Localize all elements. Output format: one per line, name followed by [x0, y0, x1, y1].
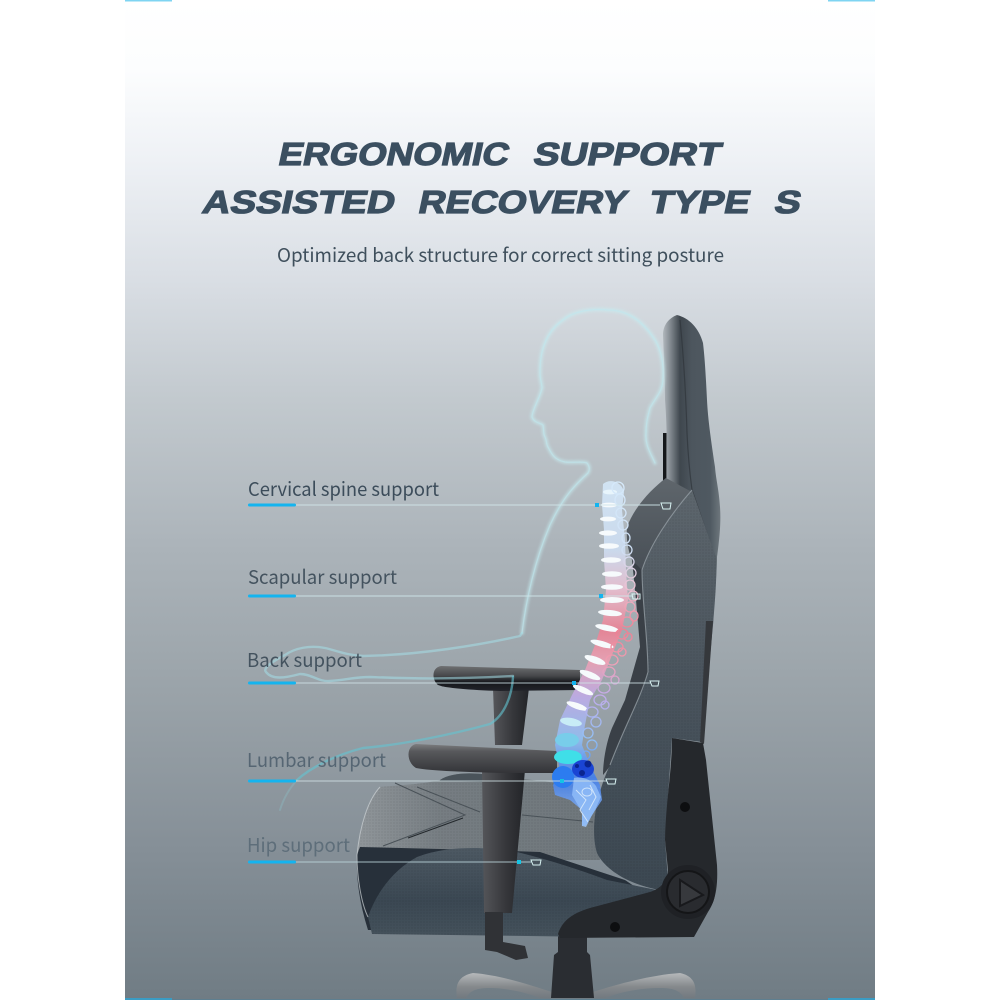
label: Hip support [247, 831, 350, 858]
back side strip [700, 621, 713, 744]
blue accent [248, 780, 296, 782]
gaming chair [357, 315, 720, 998]
tag [531, 860, 541, 865]
lumbar cyan discs [554, 716, 583, 764]
bottom accent lines [125, 998, 875, 1000]
callout: scapular support [248, 563, 640, 599]
seat edge highlight [357, 787, 380, 917]
dot [517, 860, 521, 864]
callout: lumbar support [247, 746, 616, 784]
vertebral body column [553, 481, 628, 827]
spine vertebra discs [566, 490, 624, 713]
title line 1: SUPPORT [531, 136, 725, 172]
seat seams [383, 783, 593, 846]
spinous processes [582, 482, 638, 759]
title line 2: ASSISTED [200, 184, 399, 220]
blue accent [248, 594, 296, 598]
side plate [558, 738, 717, 938]
thigh fade [280, 780, 297, 810]
leader line [248, 861, 532, 863]
head and back glow [522, 309, 663, 633]
tag [650, 681, 659, 686]
dot [560, 779, 564, 783]
seat cushion [368, 848, 660, 937]
dot [595, 503, 599, 507]
seat top texture [357, 773, 600, 860]
headrest seam [680, 320, 715, 557]
forearm and thigh outline [297, 677, 513, 780]
seat rear rim [440, 773, 490, 782]
tag [606, 779, 616, 784]
near armrest post [482, 770, 525, 913]
leader line [248, 504, 660, 506]
blue accent [248, 504, 296, 506]
background panel [125, 0, 875, 1000]
blue accent [248, 682, 296, 684]
far armrest pad [433, 666, 580, 691]
title line 2: TYPE [647, 184, 754, 220]
title line 1 [276, 136, 725, 172]
title line 2: RECOVERY [416, 184, 632, 220]
spine illustration [552, 481, 638, 827]
gas lift column [551, 936, 594, 998]
human silhouette [265, 309, 663, 810]
subtitle: Optimized back structure for correct sitting posture [277, 241, 724, 268]
head and back line [522, 309, 663, 633]
seat top [357, 773, 600, 860]
callout: back support [247, 646, 659, 686]
blue accent [248, 860, 296, 864]
label: Back support [247, 646, 362, 673]
dot [599, 594, 603, 598]
pelvis blue [552, 760, 601, 826]
backrest main [594, 490, 716, 890]
sacrum lace [576, 785, 596, 822]
title line 2: S [772, 184, 805, 220]
near armrest peg [485, 912, 528, 960]
leader line [248, 682, 651, 684]
arm outline [265, 633, 522, 681]
label: Lumbar support [247, 746, 386, 773]
title line 2 [200, 184, 805, 220]
tag [632, 594, 640, 599]
far armrest post [493, 688, 529, 745]
top accent lines [125, 0, 875, 2]
chair base legs [456, 973, 696, 998]
label: Scapular support [248, 563, 397, 590]
label: Cervical spine support [248, 475, 439, 502]
seat front band [357, 847, 640, 930]
callout: hip support [247, 831, 541, 865]
leader line [248, 780, 607, 782]
backrest fabric texture [594, 490, 716, 890]
near armrest pad [408, 744, 557, 773]
tag [661, 503, 671, 509]
inner back sliver [603, 560, 649, 775]
callout: cervical spine support [248, 475, 671, 509]
bolts [610, 802, 690, 932]
cushion texture [368, 848, 660, 937]
headrest slot [663, 433, 666, 500]
backrest wing [627, 478, 692, 572]
headrest and outer back [663, 315, 720, 625]
title line 1: ERGONOMIC [276, 136, 513, 172]
dot [572, 681, 576, 685]
recline knob [661, 865, 715, 919]
title [200, 136, 805, 220]
backrest seam [610, 490, 692, 765]
leader line [248, 595, 632, 597]
